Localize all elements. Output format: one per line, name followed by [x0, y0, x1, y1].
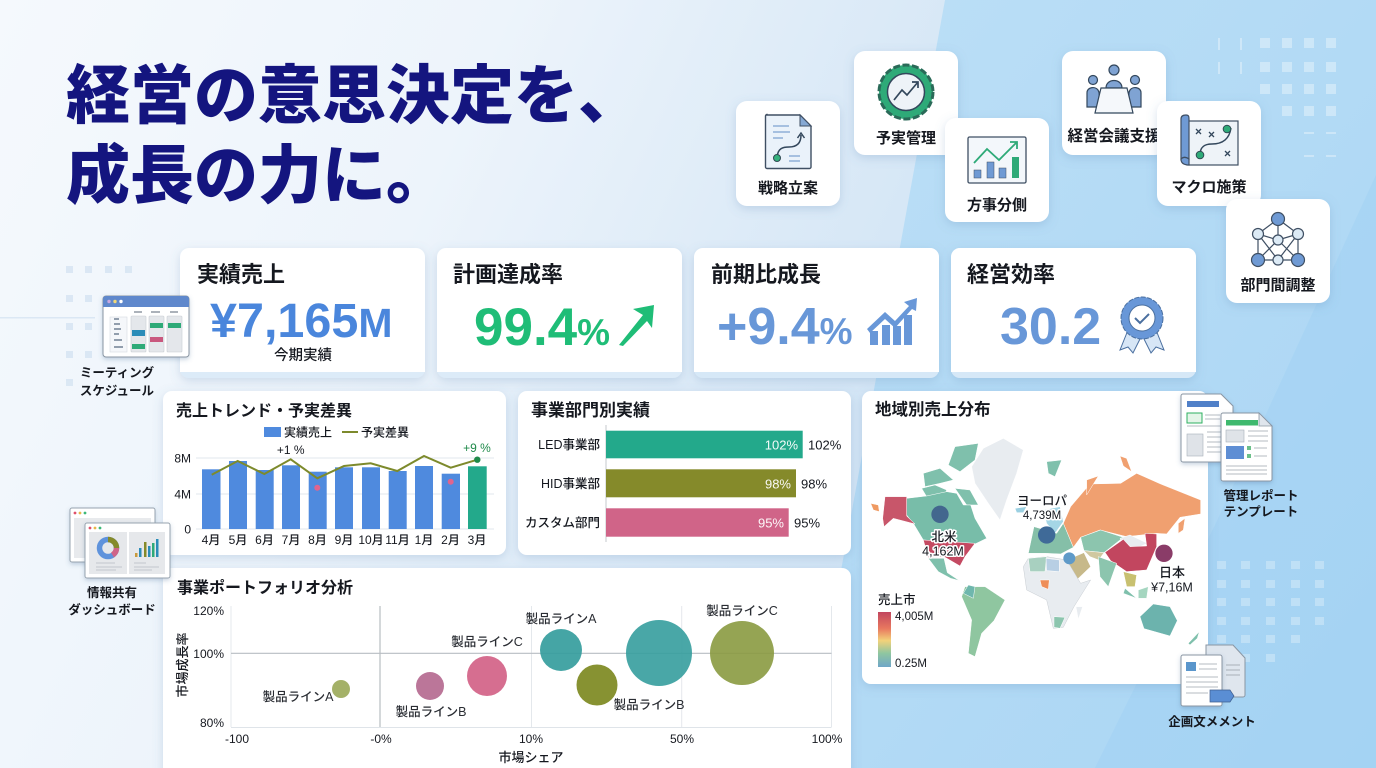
chart: bubble chart: 市場シェア [498, 750, 564, 765]
label: proposal documents: 企画文メメント [1168, 714, 1256, 729]
title [66, 60, 642, 212]
map labels: ¥7,16M [1150, 580, 1193, 594]
legend [264, 424, 409, 440]
map labels [922, 494, 1193, 594]
label: dashboard: 情報共有 [87, 585, 137, 600]
label: meeting schedule: ミーティング [80, 365, 155, 380]
icon: report templates [1181, 394, 1272, 481]
label: 予実管理 [876, 129, 936, 147]
chart: horizontal bars: 95% [794, 516, 820, 530]
chart: bubble chart [175, 603, 843, 765]
chart: bubble chart: 製品ラインB [396, 704, 466, 719]
legend: sales scale [878, 592, 933, 670]
card: 部門間調整 [1226, 199, 1330, 303]
icon: meeting [1087, 65, 1141, 113]
legend: 実績売上 [284, 424, 332, 440]
label: マクロ施策 [1171, 178, 1247, 196]
chart: monthly bars and line: 10月 [358, 533, 384, 547]
chart: monthly bars and line: 9月 [335, 533, 353, 547]
map labels: 日本 [1159, 565, 1185, 580]
heading: 売上トレンド・予実差異 [176, 401, 352, 420]
chart: monthly bars and line: 1月 [415, 533, 433, 547]
chart: bubble chart: 製品ラインC [706, 603, 778, 618]
chart: bubble chart: 製品ラインA [526, 611, 597, 626]
card: 経営会議支援 [1062, 51, 1166, 155]
chart: horizontal bars: HID事業部 [541, 476, 600, 491]
icon: rosette [1120, 297, 1164, 353]
map labels: 4,162M [922, 544, 964, 558]
icon: meeting schedule [103, 296, 189, 357]
KPI: 前期比成長 [694, 248, 939, 378]
label: report templates: 管理レポート [1223, 488, 1299, 503]
chart: bubble chart: 100% [193, 647, 224, 661]
chart: bubble chart: -0% [370, 732, 392, 746]
card: マクロ施策 [1157, 101, 1261, 206]
chart: monthly bars and line: +1 % [277, 443, 305, 457]
heading: 事業部門別実績 [531, 401, 650, 420]
label: report templates [1223, 488, 1299, 519]
label: 部門間調整 [1240, 276, 1316, 294]
icon: growth badge [879, 65, 933, 119]
chart: monthly bars and line: 3月 [468, 533, 486, 547]
chart: monthly bars and line: 7月 [282, 533, 300, 547]
legend: sales scale: 売上市 [878, 592, 916, 607]
chart: horizontal bars: 102% [808, 438, 842, 452]
value: ¥7,165M [210, 294, 392, 348]
chart: bubble chart: 市場成長率 [175, 632, 190, 698]
chart: horizontal bars: カスタム部門 [525, 515, 600, 530]
chart: bubble chart: 10% [519, 732, 543, 746]
label: dashboard [68, 585, 156, 617]
icon: dashboard [70, 508, 170, 578]
map labels: ヨーロパ [1017, 494, 1067, 508]
chart: horizontal bars: 98% [801, 476, 827, 492]
chart: horizontal bars: LED事業部 [538, 437, 600, 452]
legend: sales scale: 0.25M [895, 658, 927, 670]
card: 予実管理 [854, 51, 958, 155]
panel: portfolio [163, 568, 851, 768]
panel: sales trend [163, 391, 506, 555]
chart: monthly bars and line: 2月 [441, 533, 460, 547]
label: 戦略立案 [758, 179, 818, 197]
chart: monthly bars and line: 6月 [255, 533, 274, 547]
chart: monthly bars and line: 8月 [308, 533, 327, 547]
chart: monthly bars and line: 0 [184, 522, 191, 536]
KPI: 実績売上: 実績売上 [197, 262, 285, 287]
KPI: 経営効率: 経営効率 [967, 262, 1055, 287]
label: report templates: テンプレート [1224, 505, 1298, 519]
icon: chart [968, 137, 1026, 183]
chart: horizontal bars: 102% [765, 438, 798, 452]
chart: bubble chart: 製品ラインB [614, 697, 684, 712]
KPI: 経営効率 [951, 248, 1196, 378]
chart: bubble chart: 50% [670, 732, 694, 746]
chart: bubble chart: 製品ラインA [263, 689, 334, 704]
chart: horizontal bars: 98% [765, 476, 791, 492]
value: +9.4% [717, 298, 853, 356]
chart: monthly bars and line: 4月 [202, 533, 220, 547]
heading: 事業ポートフォリオ分析 [177, 578, 353, 597]
legend: 予実差異 [361, 424, 409, 440]
chart: horizontal bars [525, 425, 842, 542]
chart: bubble chart: 製品ラインC [451, 634, 523, 649]
chart: monthly bars and line: 8M [174, 452, 191, 466]
card: 方事分側 [945, 118, 1049, 222]
sub label: 今期実績 [274, 347, 332, 364]
chart: monthly bars and line: +9 % [463, 441, 491, 455]
chart: world map [871, 438, 1201, 657]
label: meeting schedule [80, 365, 155, 398]
panel: regional map [862, 391, 1208, 684]
chart: bubble chart: -100 [225, 732, 249, 746]
chart: bubble chart: 100% [812, 732, 843, 746]
map labels: 4,739M [1023, 510, 1061, 522]
icon: network [1252, 212, 1304, 266]
icon: proposal documents [1181, 645, 1245, 706]
icon: growth chart [867, 298, 917, 345]
title: 経営の意思決定を、 [66, 60, 642, 132]
map labels: 北米 [931, 529, 957, 544]
icon: strategy document [766, 114, 811, 168]
label: 方事分側 [967, 196, 1027, 214]
panel: division performance [518, 391, 851, 555]
chart: monthly bars and line [174, 441, 494, 547]
label: dashboard: ダッシュボード [68, 602, 156, 617]
chart: monthly bars and line: 5月 [229, 533, 247, 547]
icon: map [1181, 115, 1238, 165]
value: 99.4% [474, 298, 610, 357]
label: 経営会議支援 [1067, 126, 1161, 145]
value: 30.2 [1000, 298, 1101, 356]
KPI: 計画達成率: 計画達成率 [453, 262, 563, 287]
chart: bubble chart: 80% [200, 716, 224, 730]
icon: up arrow [619, 305, 654, 346]
title: 成長の力に。 [66, 140, 450, 212]
legend: sales scale: 4,005M [895, 611, 933, 623]
chart: bubble chart: 120% [193, 604, 224, 618]
KPI: 実績売上 [180, 248, 425, 378]
chart: horizontal bars: 95% [758, 516, 784, 530]
chart: monthly bars and line: 11月 [385, 533, 410, 547]
chart: monthly bars and line: 4M [174, 488, 191, 502]
heading: 地域別売上分布 [875, 400, 990, 419]
card: 戦略立案 [736, 101, 840, 206]
label: meeting schedule: スケジュール [80, 384, 155, 398]
KPI: 計画達成率 [437, 248, 682, 378]
KPI: 前期比成長: 前期比成長 [711, 262, 821, 287]
